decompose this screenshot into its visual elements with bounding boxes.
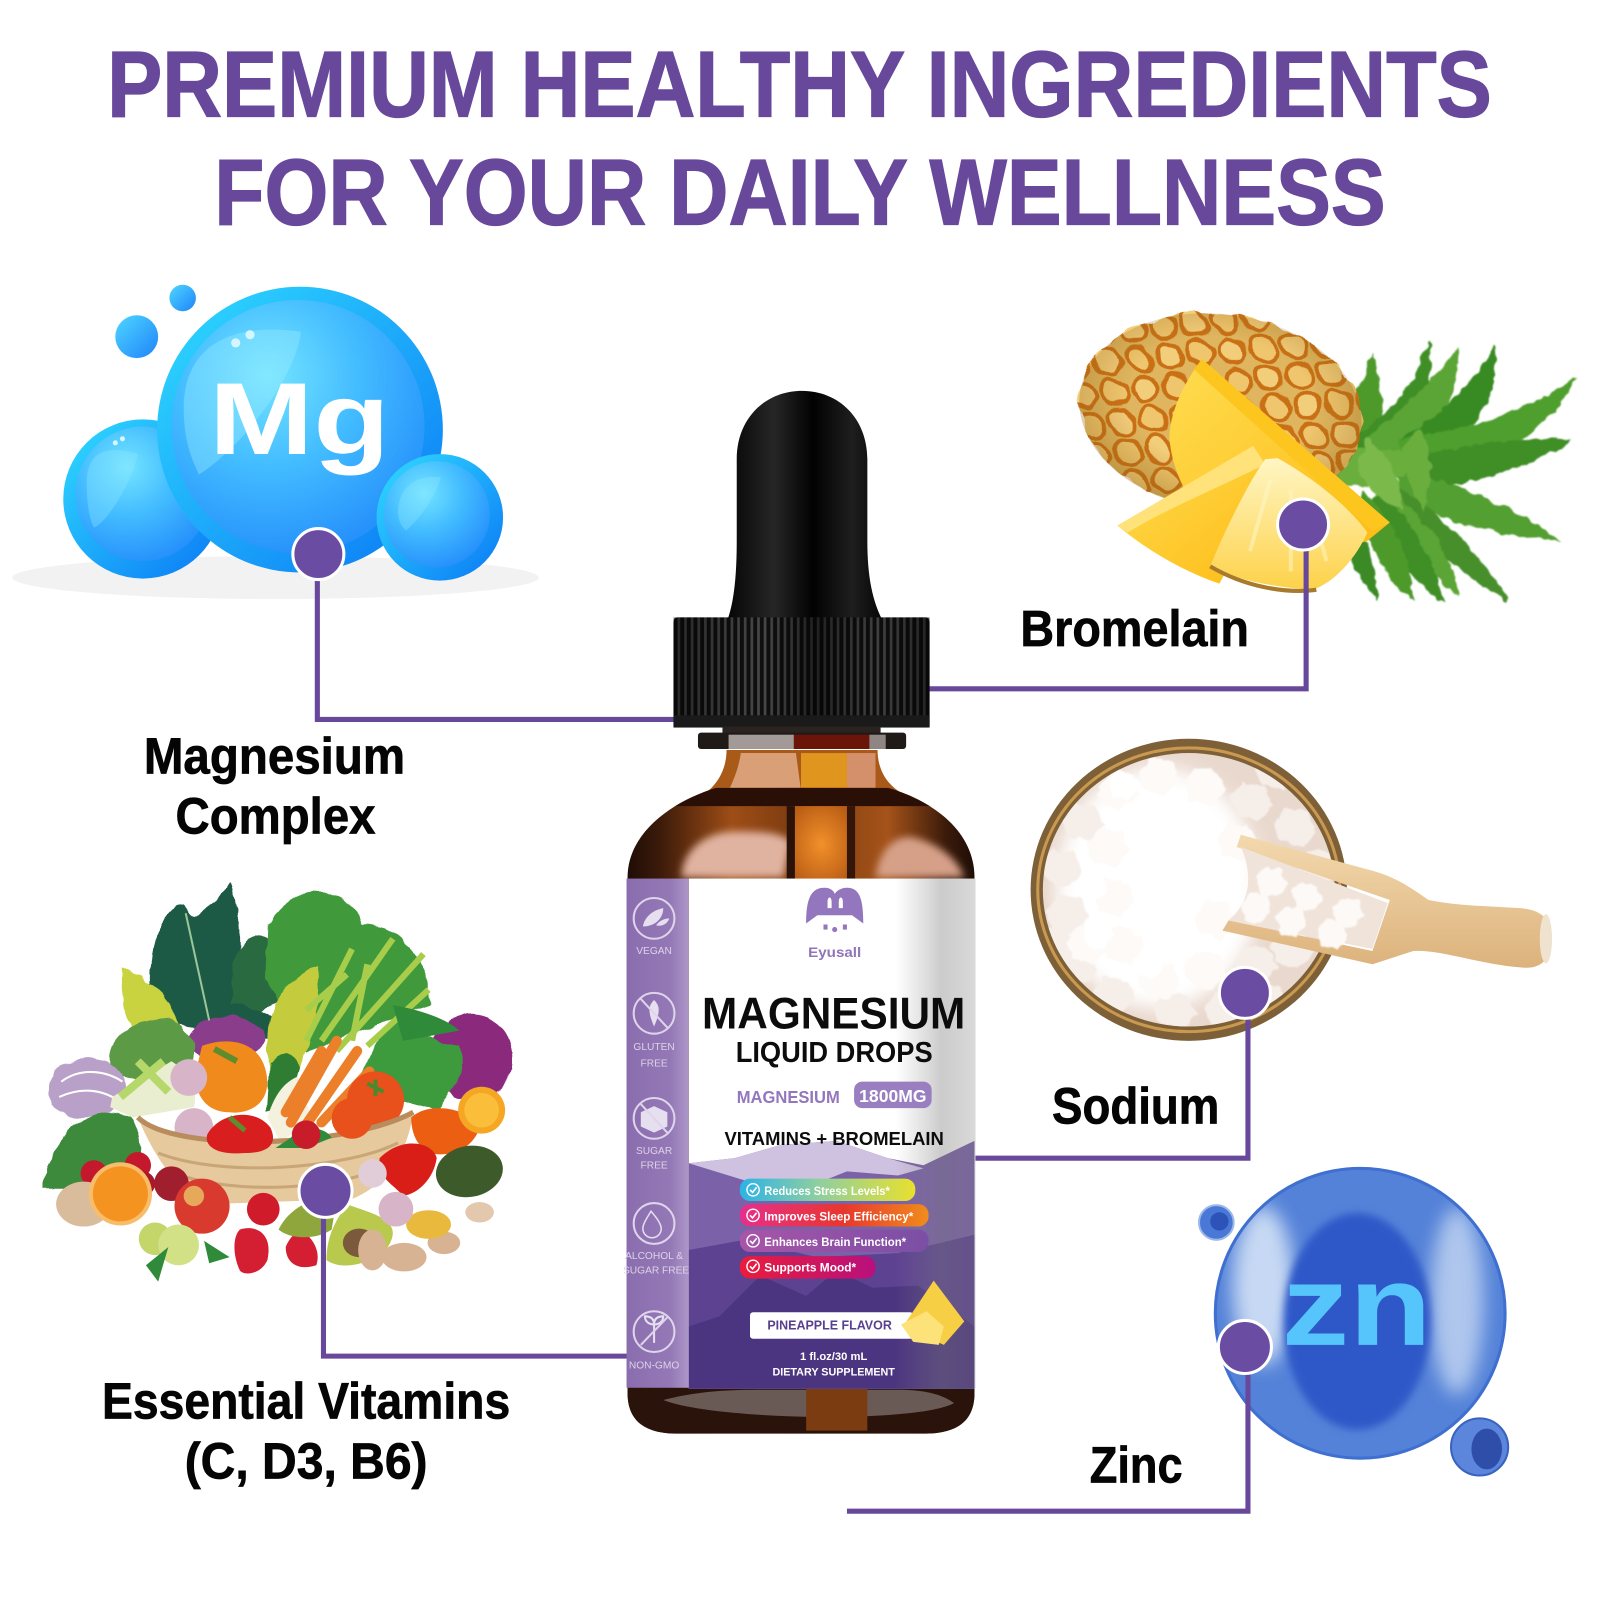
badge: gluten free: FREE (640, 1058, 668, 1069)
benefit pills: Reduces Stress Levels* (764, 1184, 890, 1198)
label: magnesium complex (144, 727, 405, 845)
net contents (772, 1351, 895, 1379)
label: side strip (627, 879, 689, 1388)
product name: LIQUID DROPS (736, 1037, 933, 1069)
marker dot: magnesium (293, 529, 344, 580)
label: magnesium complex: Magnesium (144, 727, 405, 784)
brand logo: Eyusall (808, 945, 861, 961)
flavor tag (750, 1281, 964, 1345)
connector: zinc (847, 1367, 1248, 1511)
label: essential vitamins: Essential Vitamins (102, 1372, 510, 1429)
label: bromelain: Bromelain (1020, 600, 1249, 657)
dosage: 1800MG (859, 1086, 927, 1106)
badge: gluten free (633, 993, 675, 1069)
glass body (628, 788, 974, 1437)
label: essential vitamins: (C, D3, B6) (185, 1433, 428, 1490)
label: shading (689, 879, 976, 1389)
dosage: MAGNESIUM (737, 1087, 840, 1107)
badge: alcohol and sugar free: ALCOHOL & (625, 1251, 683, 1262)
product: dropper bottle (623, 391, 976, 1437)
badge: non-gmo: NON-GMO (629, 1360, 679, 1371)
connector: sodium (969, 1010, 1248, 1158)
marker dot: zinc (1218, 1320, 1271, 1373)
illustration: basket of vegetables and fruit (43, 883, 513, 1282)
badge: vegan: VEGAN (636, 946, 672, 957)
icon: magnesium bubbles (12, 285, 539, 599)
dosage (737, 1082, 932, 1108)
label: white panel (689, 879, 976, 1389)
product name (702, 988, 965, 1069)
icon: magnesium bubbles: Mg (209, 362, 390, 476)
label: sodium: Sodium (1052, 1077, 1219, 1134)
badge: sugar free: SUGAR (636, 1146, 672, 1157)
flavor tag: PINEAPPLE FLAVOR (767, 1318, 892, 1333)
benefit pills (740, 1179, 929, 1279)
badge: non-gmo (629, 1311, 679, 1371)
bottle neck (698, 727, 906, 794)
net contents: DIETARY SUPPLEMENT (772, 1367, 895, 1379)
formula line: VITAMINS + BROMELAIN (724, 1128, 944, 1149)
benefit pills: Enhances Brain Function* (764, 1235, 906, 1249)
label: mountain background (689, 1141, 974, 1389)
connector: bromelain (923, 541, 1306, 689)
ribbed cap (673, 617, 930, 728)
badge: gluten free: GLUTEN (633, 1042, 675, 1053)
marker dot: vitamins (299, 1164, 352, 1217)
badge: alcohol and sugar free: SUGAR FREE (623, 1265, 689, 1276)
benefit pills: Improves Sleep Efficiency* (764, 1209, 913, 1223)
illustration: zinc bubble (1199, 1167, 1508, 1476)
net contents: 1 fl.oz/30 mL (800, 1351, 867, 1363)
dropper bulb (727, 391, 884, 622)
badge: alcohol and sugar free (623, 1203, 689, 1276)
title: FOR YOUR DAILY WELLNESS (214, 139, 1386, 244)
product name: MAGNESIUM (702, 988, 965, 1039)
illustration: pineapple (1066, 295, 1577, 604)
badge: sugar free (634, 1098, 674, 1171)
label: essential vitamins (102, 1372, 510, 1490)
brand logo (806, 888, 863, 961)
connector: magnesium complex (317, 571, 679, 719)
label: magnesium complex: Complex (176, 788, 376, 845)
title (107, 31, 1492, 244)
illustration: zinc bubble: zn (1282, 1243, 1432, 1370)
connector: essential vitamins (323, 1209, 633, 1356)
illustration: sea salt bowl with scoop (1031, 739, 1552, 1041)
marker dot: bromelain (1278, 499, 1329, 550)
benefit pills: Supports Mood* (764, 1260, 856, 1274)
label: zinc: Zinc (1090, 1437, 1183, 1494)
badge: sugar free: FREE (640, 1160, 668, 1171)
badge: vegan (634, 898, 674, 957)
marker dot: sodium (1219, 967, 1270, 1018)
